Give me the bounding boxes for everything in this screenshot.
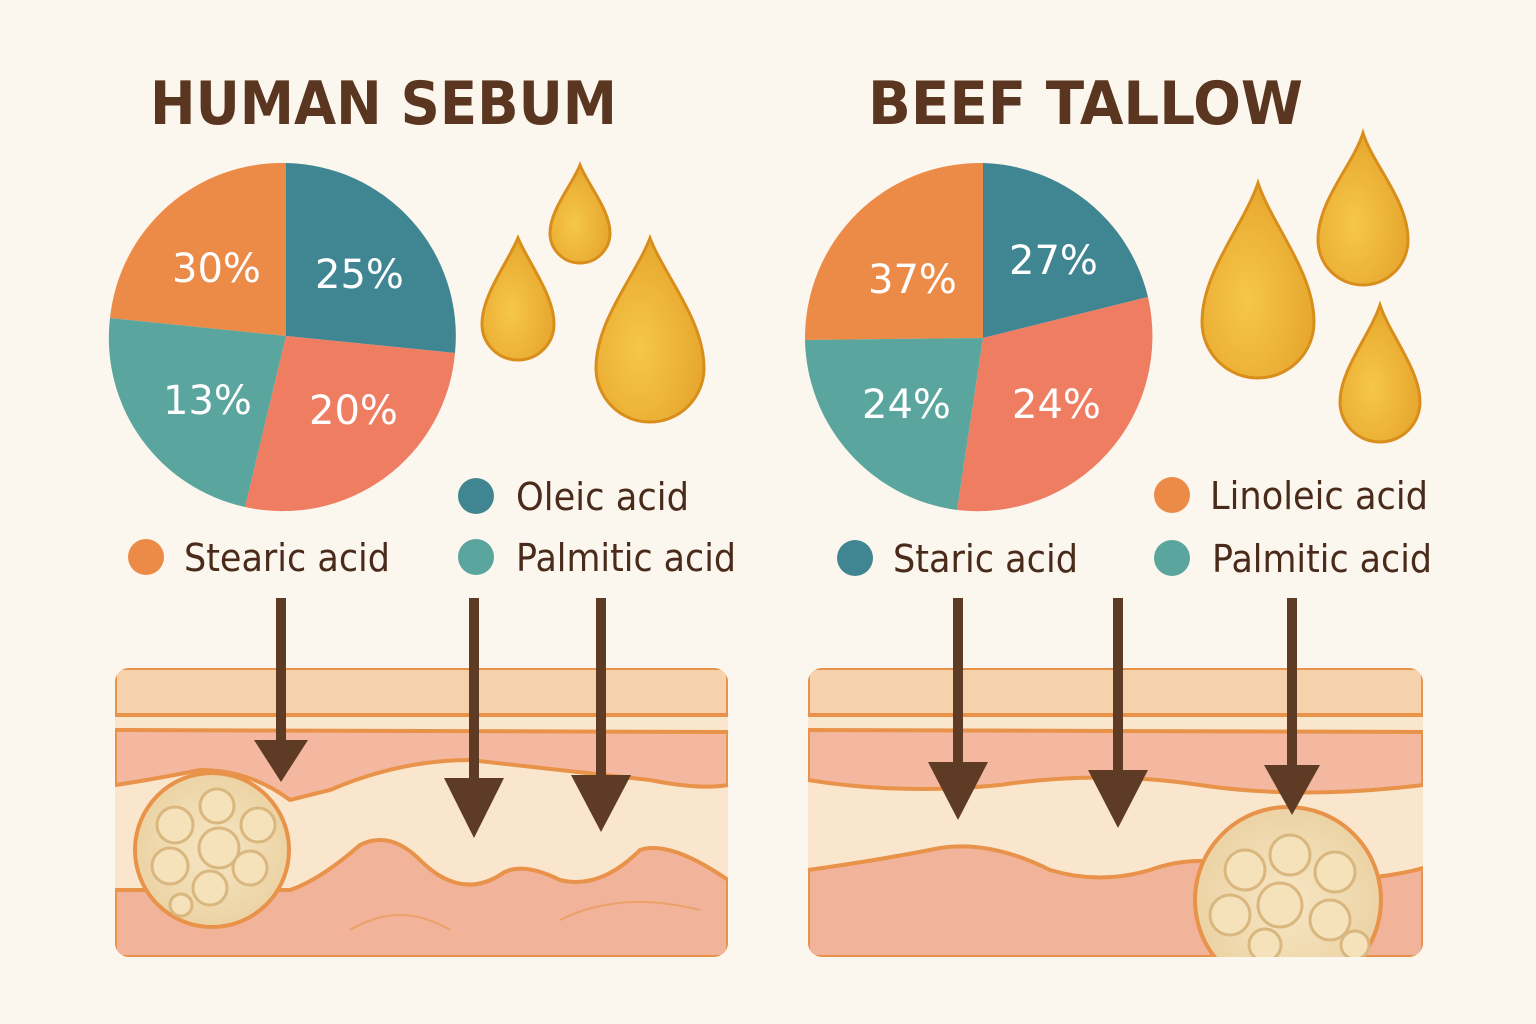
icon: oil drops right — [1202, 133, 1420, 442]
legend: human sebum: Stearic acid — [184, 536, 390, 580]
legend: beef tallow: Linoleic acid — [1210, 474, 1428, 518]
pie chart: human sebum: 20% — [309, 388, 398, 434]
pie chart: human sebum: 25% — [315, 252, 404, 298]
pie chart: beef tallow — [805, 163, 1152, 511]
title: beef tallow: BEEF TALLOW — [868, 69, 1303, 139]
legend: beef tallow: Palmitic acid — [1212, 537, 1432, 581]
legend: human sebum: Palmitic acid — [516, 536, 736, 580]
icon: fat cell cluster right — [1193, 805, 1383, 957]
legend: human sebum — [128, 475, 736, 580]
pie chart: human sebum: 30% — [172, 246, 261, 292]
pie chart: human sebum — [109, 163, 456, 511]
skin cross-section left — [115, 668, 728, 957]
icon: fat cell cluster left — [135, 773, 289, 927]
legend: beef tallow: Staric acid — [893, 537, 1078, 581]
pie chart: beef tallow: 24% — [1012, 382, 1101, 428]
pie chart: beef tallow: 37% — [868, 257, 957, 303]
legend: human sebum: Oleic acid — [516, 475, 689, 519]
pie chart: human sebum: 13% — [163, 378, 252, 424]
skin cross-section right — [808, 668, 1423, 957]
pie chart: beef tallow: 27% — [1009, 238, 1098, 284]
legend: beef tallow — [837, 474, 1432, 581]
pie chart: beef tallow: 24% — [862, 382, 951, 428]
title: human sebum: HUMAN SEBUM — [150, 69, 617, 139]
arrows left — [254, 598, 631, 838]
arrows right — [928, 598, 1320, 828]
icon: oil drops left — [482, 165, 704, 422]
